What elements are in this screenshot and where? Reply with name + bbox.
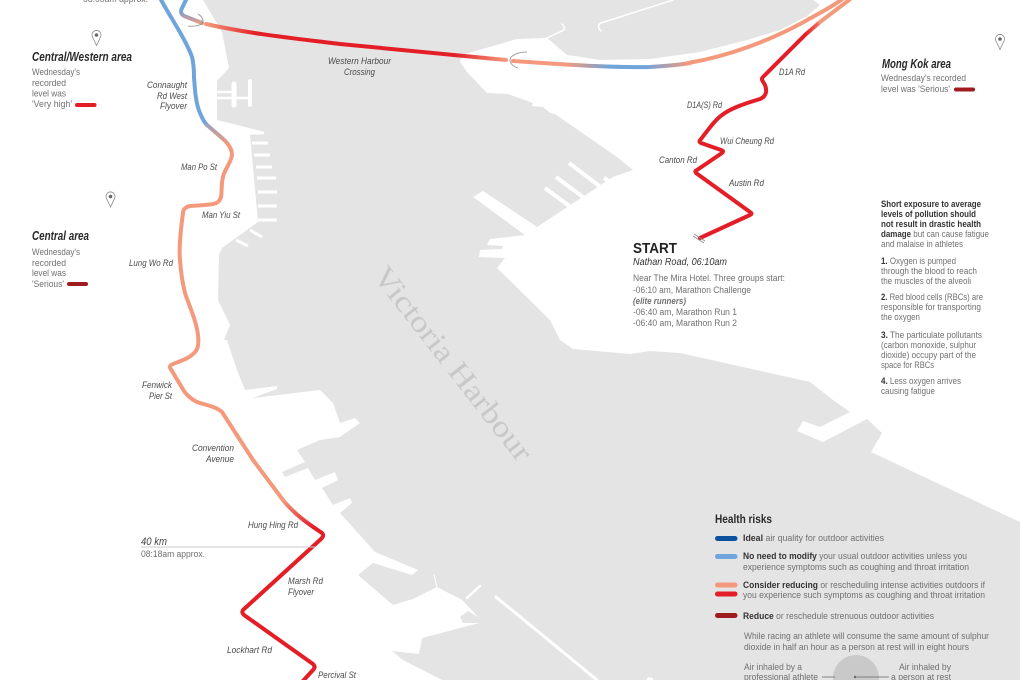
street labels: Lockhart Rd xyxy=(227,645,273,655)
panel: Central area: Wednesday's xyxy=(32,247,80,257)
panel: start information: START xyxy=(633,240,677,257)
street labels: Lung Wo Rd xyxy=(129,258,174,268)
panel: Central/Western area: 'Very high' xyxy=(32,99,72,109)
street labels: Austin Rd xyxy=(728,178,765,188)
panel: start information: Near The Mira Hotel. Three groups start: xyxy=(633,273,785,283)
panel: start information: (elite runners) xyxy=(633,296,686,306)
panel: health effect explanation: and malaise in athletes xyxy=(881,239,963,249)
panel: Central area: 'Serious' xyxy=(32,279,64,289)
street labels: Rd West xyxy=(157,91,187,101)
panel: Central area: recorded xyxy=(32,258,66,268)
panel: Mong Kok area xyxy=(881,57,973,94)
panel: health effect explanation: causing fatigue xyxy=(881,386,935,396)
street labels: Pier St xyxy=(149,391,172,401)
marker: 40 km: 08:18am approx. xyxy=(141,549,205,559)
panel: health effect explanation: the muscles of the alveoli xyxy=(881,276,971,286)
chart: air inhaled comparison: Air inhaled by xyxy=(899,662,951,672)
text: sulphur dioxide comparison xyxy=(744,631,989,652)
route: Kowloon section from start xyxy=(693,0,853,243)
street labels: Convention xyxy=(192,443,234,453)
panel: Central/Western area: Wednesday's xyxy=(32,67,80,77)
chart: air inhaled comparison xyxy=(744,655,951,680)
panel: health effect explanation: space for RBCs xyxy=(881,360,934,370)
panel: health effect explanation: the oxygen xyxy=(881,312,920,322)
panel: health effect explanation: dioxide) occupy part of the xyxy=(881,350,976,360)
panel: Central area: Central area xyxy=(32,229,89,243)
panel: start information xyxy=(633,240,785,328)
street labels: Wui Cheung Rd xyxy=(720,136,775,146)
street labels: Fenwick xyxy=(142,380,172,390)
panel: health effect explanation: not result in drastic health xyxy=(881,219,981,229)
panel: health effect explanation: levels of pollution should xyxy=(881,209,976,219)
route: Western Harbour Crossing xyxy=(181,0,845,68)
icon: pin mong kok xyxy=(996,34,1004,50)
street labels: Western Harbour xyxy=(328,56,392,66)
street labels xyxy=(129,56,806,680)
legend: health risks: Health risks xyxy=(715,514,772,526)
panel: health effect explanation: responsible for transporting xyxy=(881,302,981,312)
route: Hong Kong Island section xyxy=(160,0,323,680)
panel: Central/Western area: recorded xyxy=(32,78,66,88)
panel: Central/Western area: Central/Western area xyxy=(32,50,132,64)
panel: Central area xyxy=(32,229,89,289)
street labels: Connaught xyxy=(147,80,187,90)
panel: start information: -06:10 am, Marathon Challenge xyxy=(633,285,751,295)
panel: Central/Western area xyxy=(32,50,132,109)
label: Victoria Harbour: Victoria Harbour xyxy=(366,260,539,468)
street labels: Avenue xyxy=(205,454,234,464)
marker: 40 km xyxy=(141,536,315,559)
street labels: Man Po St xyxy=(181,162,217,172)
panel: start information: -06:40 am, Marathon Run 1 xyxy=(633,307,737,317)
legend: health risks: you experience such symptoms as coughing and throat irritation xyxy=(743,590,985,600)
street labels: Canton Rd xyxy=(659,155,698,165)
street labels: D1A(S) Rd xyxy=(687,100,723,110)
marker: 40 km: 40 km xyxy=(141,536,167,548)
icon: pin central/western xyxy=(92,30,101,46)
panel: health effect explanation: through the blood to reach xyxy=(881,266,977,276)
text: sulphur dioxide comparison: While racing an athlete will consume the same amount of sulphur xyxy=(744,631,989,641)
panel: health effect explanation: Short exposure to average xyxy=(881,199,981,209)
panel: Central/Western area: level was xyxy=(32,88,66,98)
legend: health risks: Ideal air quality for outdoor activities xyxy=(743,533,884,543)
legend: health risks xyxy=(715,514,985,621)
panel: health effect explanation: 2. Red blood cells (RBCs) are xyxy=(881,292,983,302)
street labels: Percival St xyxy=(318,670,356,680)
panel: health effect explanation: 1. Oxygen is pumped xyxy=(881,256,956,266)
legend: health risks: Consider reducing or rescheduling intense activities outdoors if xyxy=(743,580,985,590)
street labels: D1A Rd xyxy=(779,67,806,77)
panel: health effect explanation xyxy=(881,199,989,396)
panel: health effect explanation: 3. The particulate pollutants xyxy=(881,330,982,340)
panel: start information: Nathan Road, 06:10am xyxy=(633,256,727,268)
panel: Central area: level was xyxy=(32,268,66,278)
panel: health effect explanation: 4. Less oxygen arrives xyxy=(881,376,961,386)
chart: air inhaled comparison: Air inhaled by a xyxy=(744,662,802,672)
legend: health risks: experience symptoms such as coughing and throat irritation xyxy=(743,562,969,572)
text: sulphur dioxide comparison: dioxide in half an hour as a person at rest will in eight hours xyxy=(744,642,969,652)
legend: health risks: No need to modify your usual outdoor activities unless you xyxy=(743,551,967,561)
panel: health effect explanation: damage but can cause fatigue xyxy=(881,229,989,239)
street labels: Hung Hing Rd xyxy=(248,520,299,530)
street labels: Flyover xyxy=(288,587,315,597)
street labels: Man Yiu St xyxy=(202,210,240,220)
panel: Mong Kok area: Mong Kok area xyxy=(882,57,951,71)
street labels: Flyover xyxy=(160,101,188,111)
icon: pin central xyxy=(106,192,115,207)
street labels: Marsh Rd xyxy=(288,576,324,586)
panel: Mong Kok area: Wednesday's recorded xyxy=(881,73,966,83)
panel: health effect explanation: (carbon monoxide, sulphur xyxy=(881,340,976,350)
panel: start information: -06:40 am, Marathon Run 2 xyxy=(633,318,737,328)
street labels: Crossing xyxy=(344,67,375,77)
panel: Mong Kok area: level was 'Serious' xyxy=(881,84,950,94)
legend: health risks: Reduce or reschedule strenuous outdoor activities xyxy=(743,611,934,621)
